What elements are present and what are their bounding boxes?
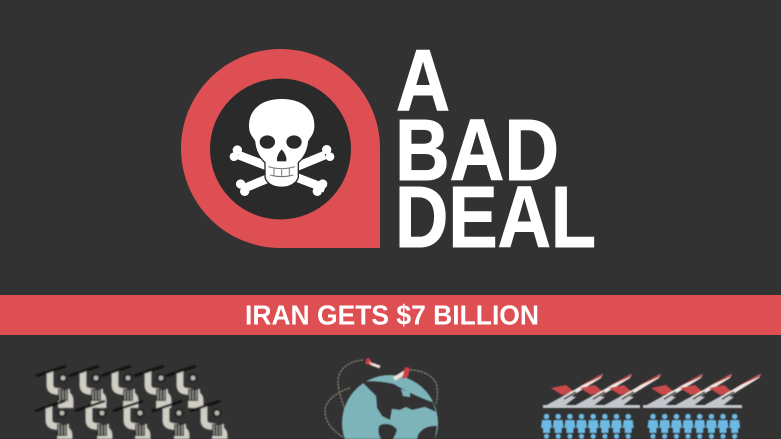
people [541,414,634,433]
missile: right [394,367,411,379]
missile: left [365,358,380,367]
icon: skull and crossbones [230,98,334,196]
icon group: missiles and people [541,374,761,439]
icon group: soldiers [35,366,224,439]
banner text: IRAN GETS $7 BILLION [245,300,539,330]
launchers base [543,405,640,408]
title: A BAD DEAL [395,32,596,266]
title: A BAD DEAL: BAD [395,102,559,199]
title: A BAD DEAL: A [396,32,450,130]
icon: globe with missile trajectories [325,358,438,439]
globe [342,375,438,439]
logo: red location pin with skull [181,49,380,248]
pin shape [181,49,380,248]
banner [0,295,781,335]
orbit paths [325,360,437,437]
continents [362,381,436,420]
pin inner circle [210,78,351,220]
title: A BAD DEAL: DEAL [395,169,596,266]
